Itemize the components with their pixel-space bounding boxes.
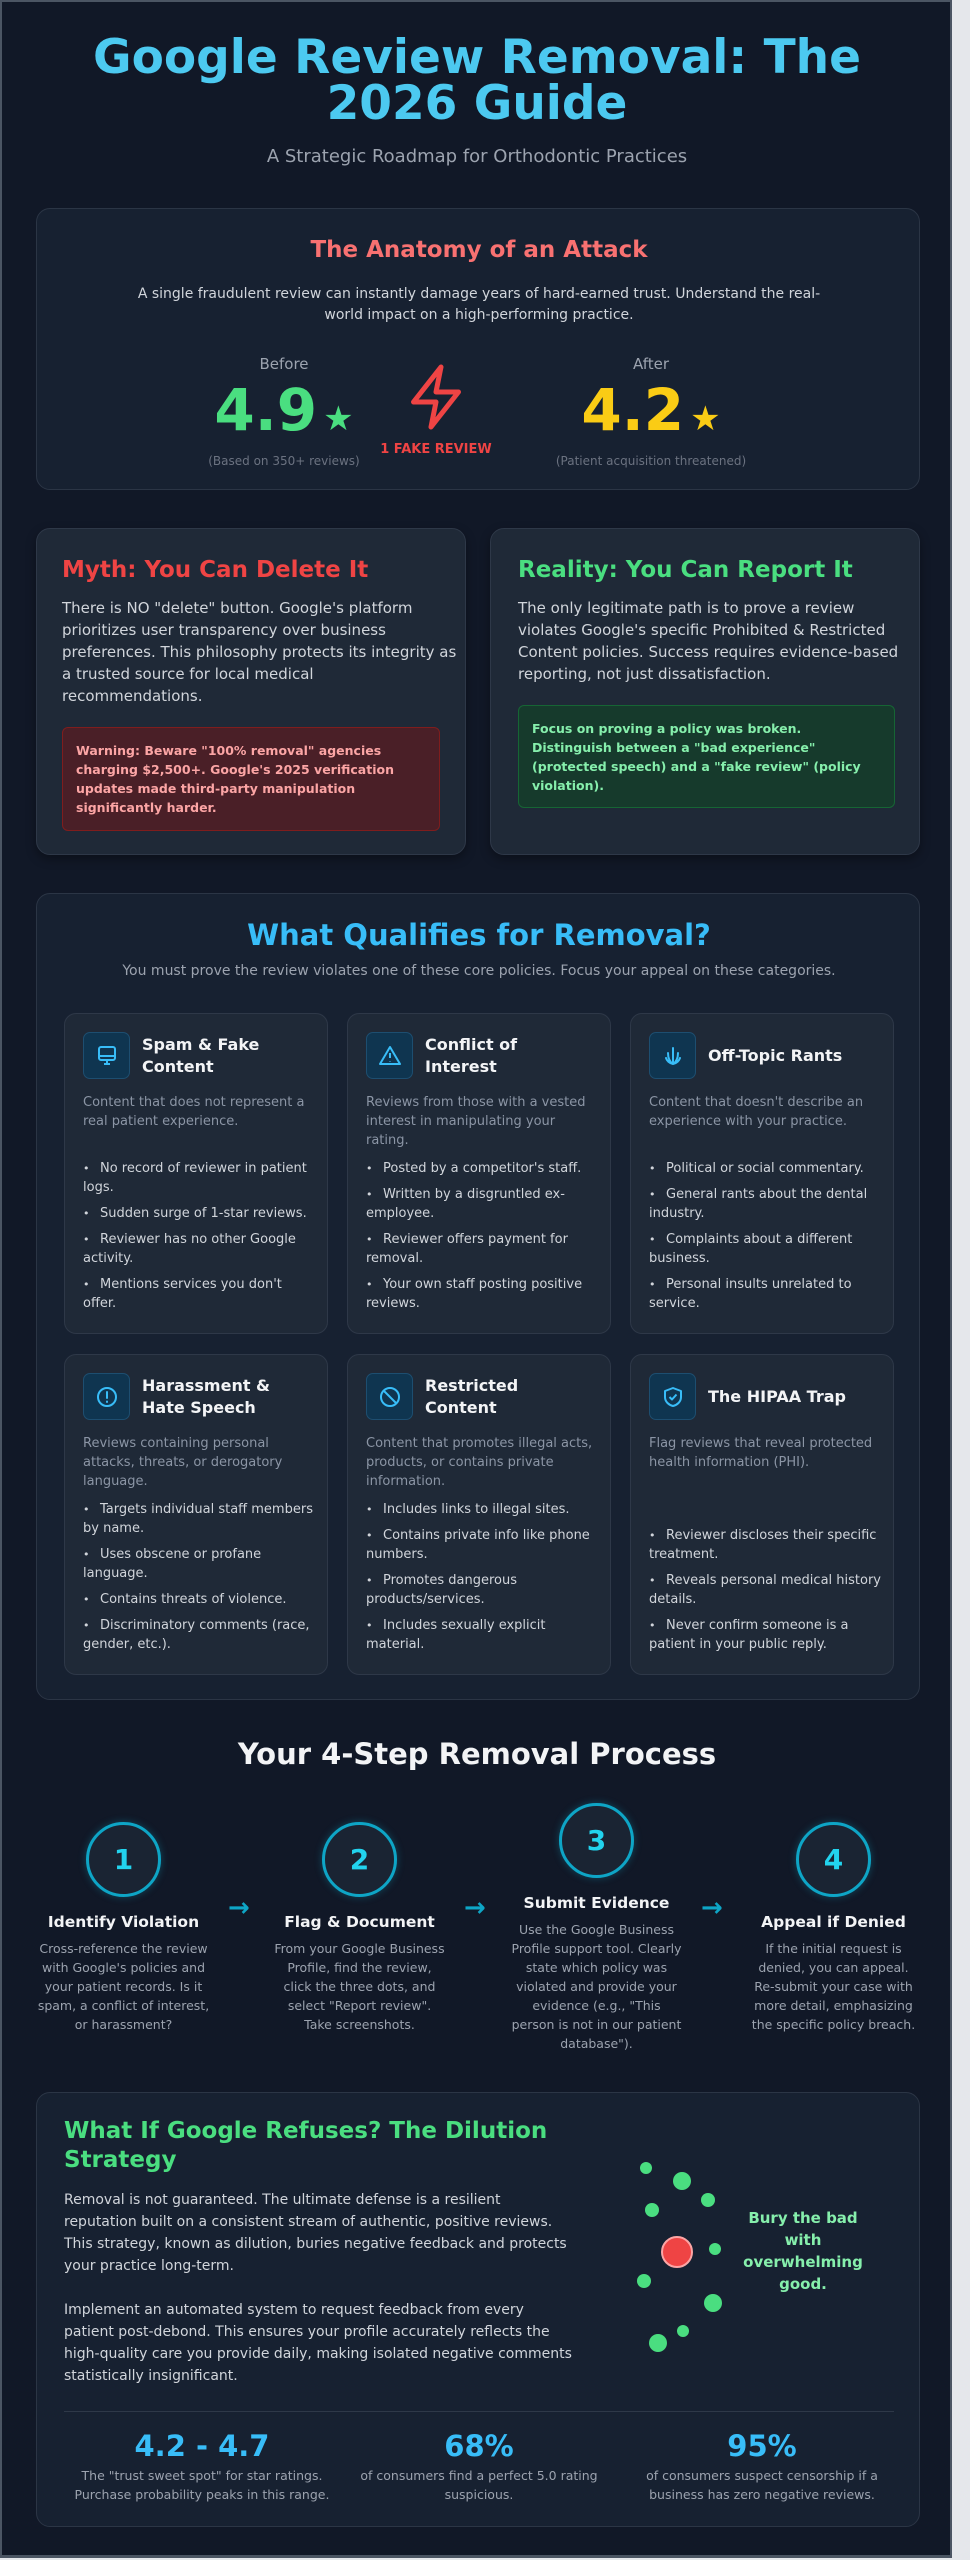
text: dilution body: patient post-debond. This ensures your profile accurately reflects the: [64, 2324, 550, 2340]
chart: dilution dots: [637, 2162, 722, 2352]
step 4: [752, 1818, 915, 2032]
card: conflict: Conflict of: [425, 1034, 517, 1054]
card: restricted: [347, 1354, 611, 1675]
text: reality body: The only legitimate path is to prove a review violates Google's specific Prohibited & Restricted Content policies. Success requires evidence-based reporting, not just dissatisfaction.: [518, 599, 898, 683]
card: restricted: Content: [425, 1398, 497, 1416]
card: conflict: Written by a disgruntled ex-employee.: [366, 1187, 565, 1221]
card: hipaa: Reviewer discloses their specific treatment.: [649, 1528, 876, 1562]
stat: after: (Patient acquisition threatened): [556, 454, 746, 468]
step 1: Cross-reference the review with Google's policies and your patient records. Is it spam, a conflict of interest, or harassment?: [38, 1941, 209, 2032]
card: hipaa: Reveals personal medical history details.: [649, 1573, 881, 1607]
heading: dilution: What If Google Refuses? The Dilution Strategy: [64, 2118, 547, 2173]
title: Google Review Removal: The: [93, 30, 861, 85]
step 1: 1: [114, 1843, 133, 1876]
card: hipaa: The HIPAA Trap: [708, 1386, 846, 1406]
step 3: Use the Google Business Profile support tool. Clearly state which policy was violated and provide your evidence (e.g., "This person is not in our patient database").: [512, 1922, 681, 2051]
card: restricted: Promotes dangerous products/services.: [366, 1573, 517, 1607]
card: conflict: Reviews from those with a vested interest in manipulating your rating.: [366, 1095, 586, 1148]
card: spam: Sudden surge of 1-star reviews.: [100, 1206, 307, 1221]
card: harassment: Targets individual staff members by name.: [83, 1502, 313, 1536]
card: off-topic: Complaints about a different business.: [649, 1232, 852, 1266]
card: harassment: Reviews containing personal attacks, threats, or derogatory language.: [83, 1436, 282, 1489]
step 2: Flag & Document: [284, 1913, 435, 1931]
callout: warning: Warning: Beware "100% removal" agencies charging $2,500+. Google's 2025 verification updates made third-party manipulation significantly harder.: [76, 743, 394, 815]
text: qualifies subtitle: You must prove the review violates one of these core policies. Focus your appeal on these categories.: [122, 963, 836, 979]
icon: lightning bolt: [380, 364, 492, 457]
panel: what qualifies: [36, 893, 920, 1700]
text: myth body: recommendations.: [62, 687, 202, 705]
card: conflict: Posted by a competitor's staff.: [383, 1161, 581, 1176]
text: dilution body: high-quality care you provide daily, making isolated negative comments: [64, 2346, 572, 2362]
card: spam: Content that does not represent a real patient experience.: [83, 1095, 304, 1129]
panel: reality: [490, 528, 920, 855]
card: off-topic: Content that doesn't describe an experience with your practice.: [649, 1095, 863, 1129]
step 2: From your Google Business Profile, find the review, click the three dots, and select "Report review". Take screenshots.: [274, 1941, 445, 2032]
arrow 3: →: [701, 1893, 723, 1923]
stat: 68%: [360, 2429, 598, 2502]
stats row: [64, 2411, 894, 2511]
text: dilution body: Removal is not guaranteed. The ultimate defense is a resilient: [64, 2192, 501, 2208]
arrow 1: →: [228, 1893, 250, 1923]
card: spam: Mentions services you don't offer.: [83, 1277, 282, 1311]
card: restricted: Includes sexually explicit material.: [366, 1618, 546, 1652]
card: harassment: Discriminatory comments (race, gender, etc.).: [83, 1618, 310, 1652]
card: restricted: Content that promotes illegal acts, products, or contains private information.: [366, 1436, 592, 1489]
callout: focus: Focus on proving a policy was broken. Distinguish between a "bad experience" (protected speech) and a "fake review" (policy violation).: [532, 721, 861, 793]
heading: 4-step process: Your 4-Step Removal Process: [238, 1737, 716, 1771]
title: [93, 30, 861, 131]
step 4: Appeal if Denied: [761, 1913, 906, 1931]
step 3: [512, 1800, 682, 2051]
subtitle: A Strategic Roadmap for Orthodontic Practices: [267, 146, 687, 167]
stat: before: 4.9★: [214, 376, 354, 444]
card: hipaa: Flag reviews that reveal protected health information (PHI).: [649, 1436, 872, 1470]
callout: warning: [62, 727, 440, 831]
card: spam: [64, 1013, 328, 1334]
callout: bury the bad: Bury the bad with overwhelming good.: [743, 2209, 863, 2293]
text: myth body: prioritizes user transparency over business: [62, 621, 386, 639]
text: dilution body: your practice long-term.: [64, 2258, 234, 2274]
card: harassment: Uses obscene or profane language.: [83, 1547, 261, 1581]
card: off-topic: Off-Topic Rants: [708, 1046, 842, 1064]
card: restricted: Includes links to illegal sites.: [383, 1502, 570, 1517]
stat: 68%: 68%: [444, 2429, 514, 2463]
panel: anatomy of an attack: [36, 208, 920, 490]
stat: after: [556, 355, 746, 468]
step 4: If the initial request is denied, you can appeal. Re-​submit your case with more detail, emphasizing the specific policy breach.: [752, 1941, 915, 2032]
stat: 95%: 95%: [727, 2429, 797, 2463]
card: conflict: Interest: [425, 1056, 497, 1076]
stat: sweet spot: [75, 2429, 329, 2502]
card: conflict: Your own staff posting positive reviews.: [366, 1277, 582, 1311]
heading: qualifies: What Qualifies for Removal?: [247, 918, 711, 952]
text: myth body: a trusted source for local medical: [62, 665, 314, 683]
card: hipaa: [630, 1354, 894, 1675]
step 1: Identify Violation: [48, 1913, 199, 1931]
stat: 68%: of consumers find a perfect 5.0 rating suspicious.: [360, 2468, 598, 2502]
step 2: 2: [350, 1843, 369, 1876]
card: conflict: Reviewer offers payment for removal.: [366, 1232, 568, 1266]
heading: anatomy: The Anatomy of an Attack: [310, 237, 648, 263]
title: 2026 Guide: [327, 76, 627, 131]
stat: sweet spot: The "trust sweet spot" for star ratings. Purchase probability peaks in this range.: [75, 2468, 329, 2502]
stat: before: [208, 355, 360, 468]
card: restricted: Contains private info like phone numbers.: [366, 1528, 590, 1562]
stat: before: Before: [259, 355, 309, 373]
card: harassment: Harassment & Hate Speech: [142, 1376, 270, 1416]
text: anatomy description: A single fraudulent review can instantly damage years of hard-earned trust. Understand the real-world impact on a high-performing practice.: [138, 286, 820, 323]
panel: dilution strategy: [36, 2092, 920, 2527]
text: myth body: There is NO "delete" button. Google's platform: [62, 599, 412, 617]
card: conflict: [347, 1013, 611, 1334]
step 1: [38, 1818, 209, 2032]
card: harassment: [64, 1354, 328, 1675]
text: dilution body: [64, 2192, 572, 2384]
stat: after: After: [633, 355, 669, 373]
card: off-topic: Political or social commentary.: [666, 1161, 864, 1176]
step 4: 4: [824, 1843, 843, 1876]
card: restricted: Restricted: [425, 1376, 518, 1394]
card: harassment: Contains threats of violence.: [100, 1592, 287, 1607]
card: hipaa: Never confirm someone is a patient in your public reply.: [649, 1618, 849, 1652]
card: spam: Reviewer has no other Google activity.: [83, 1232, 296, 1266]
card: spam: Spam & Fake Content: [142, 1034, 259, 1076]
arrow 2: →: [464, 1893, 486, 1923]
callout: focus: [518, 705, 895, 808]
stat: 95%: [646, 2429, 878, 2502]
stat: after: 4.2★: [581, 376, 721, 444]
card: off-topic: General rants about the dental industry.: [649, 1187, 867, 1221]
text: myth body: [62, 599, 456, 705]
text: dilution body: This strategy, known as dilution, buries negative feedback and protects: [64, 2236, 567, 2252]
text: dilution body: statistically insignificant.: [64, 2368, 238, 2384]
step 3: Submit Evidence: [524, 1894, 669, 1912]
panel: myth: [36, 528, 466, 855]
step 2: [274, 1818, 445, 2032]
text: dilution body: reputation built on a consistent stream of authentic, positive reviews.: [64, 2214, 552, 2230]
step 3: 3: [587, 1824, 606, 1857]
stat: 95%: of consumers suspect censorship if a business has zero negative reviews.: [646, 2468, 878, 2502]
icon: lightning bolt: 1 FAKE REVIEW: [380, 442, 492, 457]
heading: myth: Myth: You Can Delete It: [62, 557, 368, 583]
stat: sweet spot: 4.2 - 4.7: [134, 2429, 269, 2463]
stat: before: (Based on 350+ reviews): [208, 454, 360, 468]
card: spam: No record of reviewer in patient logs.: [83, 1161, 307, 1195]
text: myth body: preferences. This philosophy protects its integrity as: [62, 643, 456, 661]
card: off-topic: [630, 1013, 894, 1334]
text: dilution body: Implement an automated system to request feedback from every: [64, 2302, 524, 2318]
card: off-topic: Personal insults unrelated to service.: [649, 1277, 852, 1311]
heading: reality: Reality: You Can Report It: [518, 557, 853, 583]
